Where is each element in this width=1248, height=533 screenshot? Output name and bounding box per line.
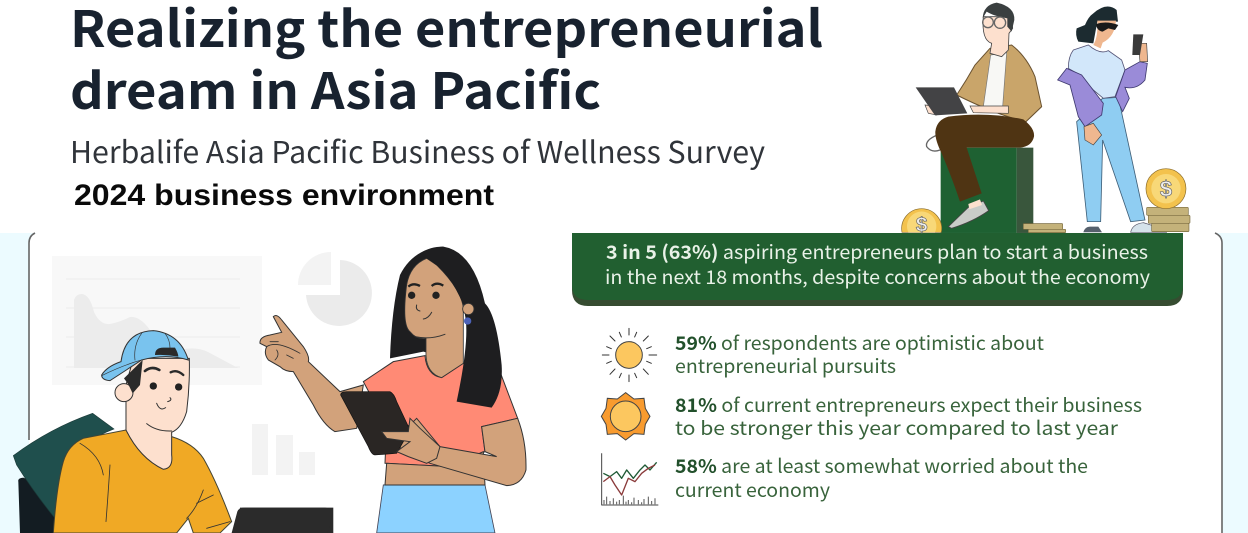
shirt [983, 53, 1007, 107]
laptop and hands [925, 105, 937, 115]
block [941, 148, 1033, 233]
icon: market line chart [602, 453, 658, 505]
banner text: 3 in 5 (63%) aspiring entrepreneurs plan to start a business [606, 238, 1148, 265]
hair [124, 360, 143, 393]
jacket right [1116, 62, 1147, 112]
text: 81% stronger [675, 391, 1142, 441]
icon: orange sun [601, 393, 650, 440]
jeans [1077, 97, 1145, 222]
illustration: faded background charts [52, 252, 372, 475]
chair [13, 413, 114, 533]
title [70, 0, 823, 124]
hand and phone [1138, 43, 1148, 62]
front shoe [948, 201, 989, 228]
neck and face [126, 358, 189, 469]
title: dream in Asia Pacific [70, 52, 601, 124]
shirt [363, 356, 518, 467]
coin left [902, 209, 942, 237]
banner text: in the next 18 months, despite concerns about the economy [605, 263, 1150, 290]
text: 81% stronger: to be stronger this year compared to last year [675, 414, 1119, 441]
hand on tablet [382, 418, 440, 463]
back shoe [926, 135, 940, 151]
hair [1076, 7, 1118, 43]
hair back [390, 247, 450, 358]
woman [1058, 7, 1167, 232]
face details [145, 368, 183, 431]
ear [115, 384, 133, 402]
text: 59% optimistic [675, 329, 1044, 379]
tablet [341, 392, 410, 455]
coins small stack [1023, 224, 1066, 233]
hair front [420, 247, 502, 408]
background: lower tint band [0, 233, 1248, 533]
face [1093, 21, 1116, 48]
banner text [605, 238, 1150, 290]
face and neck [405, 258, 463, 378]
icon: sun with rays [602, 328, 657, 382]
text: 59% optimistic: 59% of respondents are optimistic about [675, 329, 1044, 356]
section heading: 2024 business environment [74, 179, 494, 212]
jacket left [1058, 68, 1103, 127]
torso and arm [385, 452, 485, 485]
text: 59% optimistic: entrepreneurial pursuits [675, 352, 896, 379]
text: 58% worried: current economy [675, 476, 830, 503]
head [983, 3, 1014, 57]
coin stack right [1147, 207, 1190, 232]
text: 58% worried [675, 452, 1088, 503]
illustration: man in cap with laptop [13, 331, 333, 533]
text: 58% worried: 58% are at least somewhat worried about the [675, 452, 1088, 479]
text: 81% stronger: 81% of current entrepreneurs expect their business [675, 391, 1142, 418]
skirt [377, 485, 495, 533]
pants [935, 115, 1034, 202]
panel: white content card [29, 233, 1222, 533]
t-shirt [1068, 45, 1125, 98]
illustration: woman with tablet [240, 247, 526, 533]
laptop [232, 508, 333, 533]
coin right [1146, 169, 1186, 209]
sweater [53, 430, 232, 533]
panel: green headline banner [572, 233, 1183, 306]
subtitle: Herbalife Asia Pacific Business of Wellness Survey [70, 128, 765, 172]
pointing arm and hand [260, 316, 363, 432]
shoes [1083, 227, 1102, 232]
jacket [957, 45, 1042, 122]
illustration: seated man on green block [902, 3, 1190, 237]
laptop end [240, 508, 332, 533]
coin right: $ [1160, 177, 1172, 202]
cap [102, 331, 188, 381]
coin left: $ [916, 214, 928, 237]
